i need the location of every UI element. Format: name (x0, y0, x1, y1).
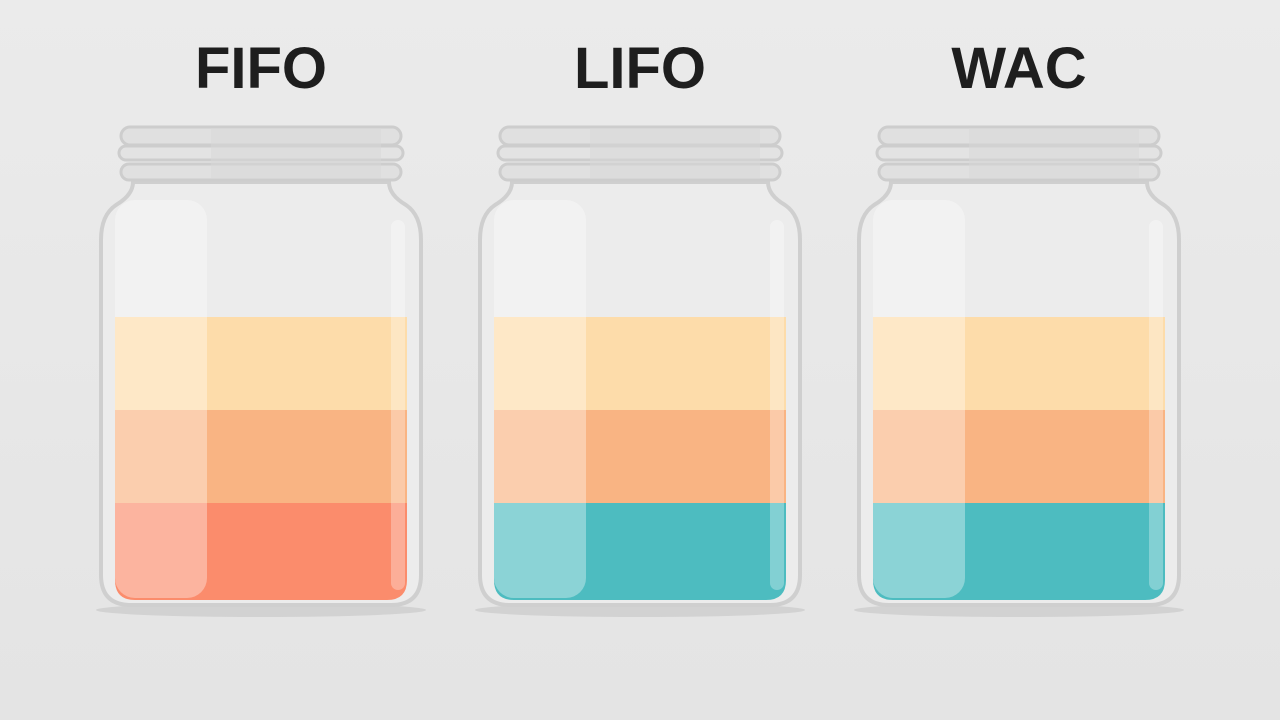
liquid layers (115, 317, 407, 600)
title: FIFO: FIFO (195, 36, 327, 101)
title: WAC: WAC (951, 36, 1087, 101)
liquid layers (494, 317, 786, 600)
jar: FIFO (96, 127, 426, 617)
jar: LIFO (475, 127, 805, 617)
jar: WAC (854, 127, 1184, 617)
liquid layers (873, 317, 1165, 600)
title: LIFO: LIFO (574, 36, 706, 101)
